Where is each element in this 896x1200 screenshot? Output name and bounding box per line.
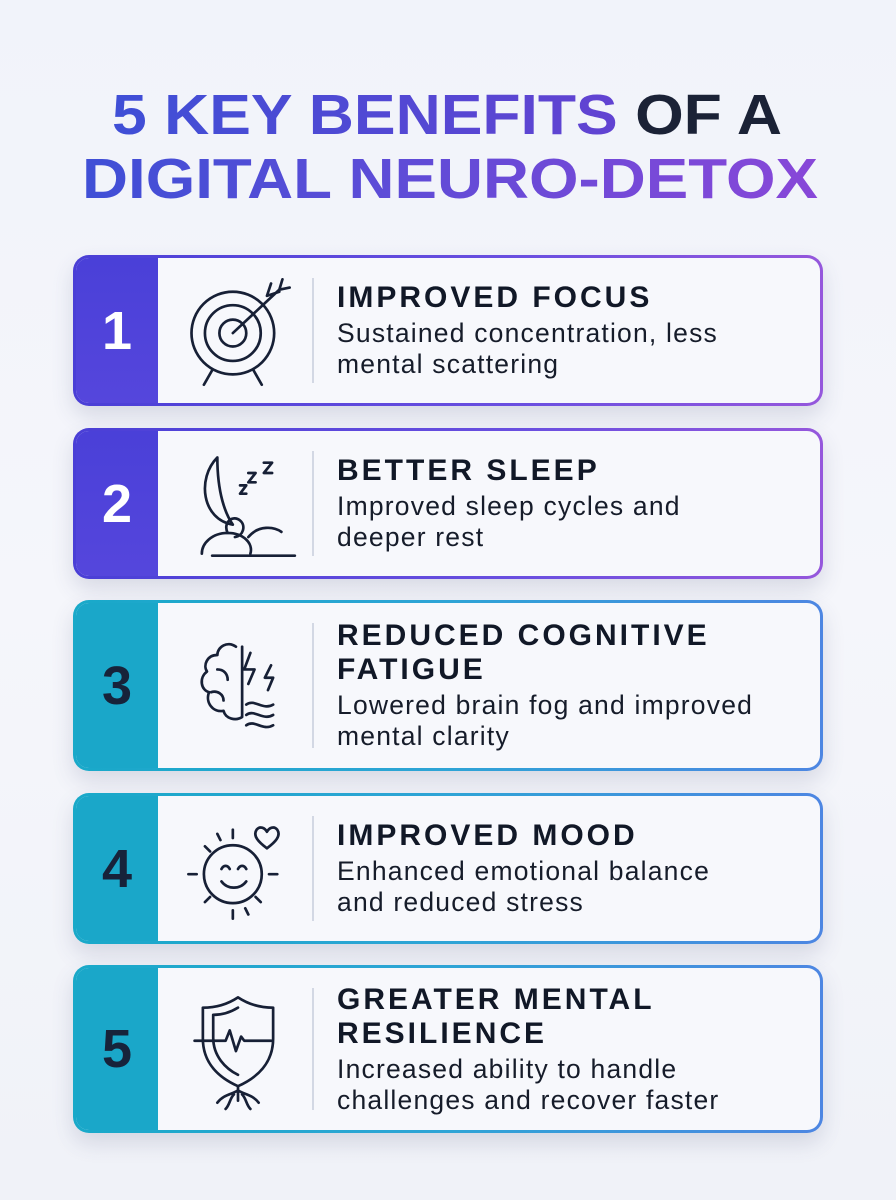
text: improved focus: Sustained concentration, less — [337, 318, 718, 348]
text: improved focus: IMPROVED FOCUS — [337, 281, 652, 314]
icon: target — [190, 278, 291, 386]
panel: card 1 improved focus — [73, 255, 823, 406]
number 1: 1 — [102, 300, 132, 360]
number 4 — [76, 796, 158, 941]
text: reduced cognitive fatigue: FATIGUE — [337, 653, 486, 686]
text: greater mental resilience: challenges and recover faster — [337, 1084, 719, 1114]
text: reduced cognitive fatigue — [337, 619, 753, 751]
text: greater mental resilience: GREATER MENTAL — [337, 982, 655, 1016]
text: reduced cognitive fatigue: REDUCED COGNITIVE — [337, 619, 710, 652]
title — [82, 83, 818, 211]
text: improved mood: Enhanced emotional balance — [337, 856, 710, 886]
number 1 — [76, 258, 158, 403]
panel: card 5 greater mental resilience — [73, 965, 823, 1133]
text: improved focus — [337, 281, 718, 379]
panel: card 3 reduced cognitive fatigue — [73, 600, 823, 771]
number 3 — [76, 603, 158, 768]
icon: sleep — [200, 456, 296, 557]
panel: card 4 improved mood — [73, 793, 823, 944]
text: greater mental resilience: RESILIENCE — [337, 1016, 547, 1050]
text: better sleep: Improved sleep cycles and — [337, 491, 681, 521]
number 5 — [76, 968, 158, 1130]
icon: smiling sun — [187, 826, 280, 920]
text: better sleep: BETTER SLEEP — [337, 454, 600, 487]
text: greater mental resilience: Increased ability to handle — [337, 1054, 677, 1084]
icon: brain — [200, 642, 275, 728]
title: 5 KEY BENEFITS OF A — [112, 83, 782, 147]
text: better sleep — [337, 454, 681, 552]
text: improved mood: IMPROVED MOOD — [337, 819, 638, 852]
text: improved mood — [337, 819, 710, 917]
number 2 — [76, 431, 158, 576]
number 3: 3 — [102, 656, 132, 716]
text: improved focus: mental scattering — [337, 349, 559, 379]
text: reduced cognitive fatigue: mental clarity — [337, 721, 510, 751]
text: improved mood: and reduced stress — [337, 887, 584, 917]
panel: card 2 better sleep — [73, 428, 823, 579]
number 4: 4 — [102, 838, 132, 898]
icon: shield with roots — [193, 996, 274, 1110]
text: reduced cognitive fatigue: Lowered brain fog and improved — [337, 690, 753, 720]
text: better sleep: deeper rest — [337, 522, 484, 552]
title: DIGITAL NEURO-DETOX — [82, 147, 818, 211]
number 2: 2 — [102, 474, 132, 534]
text: greater mental resilience — [337, 982, 719, 1114]
number 5: 5 — [102, 1019, 132, 1079]
